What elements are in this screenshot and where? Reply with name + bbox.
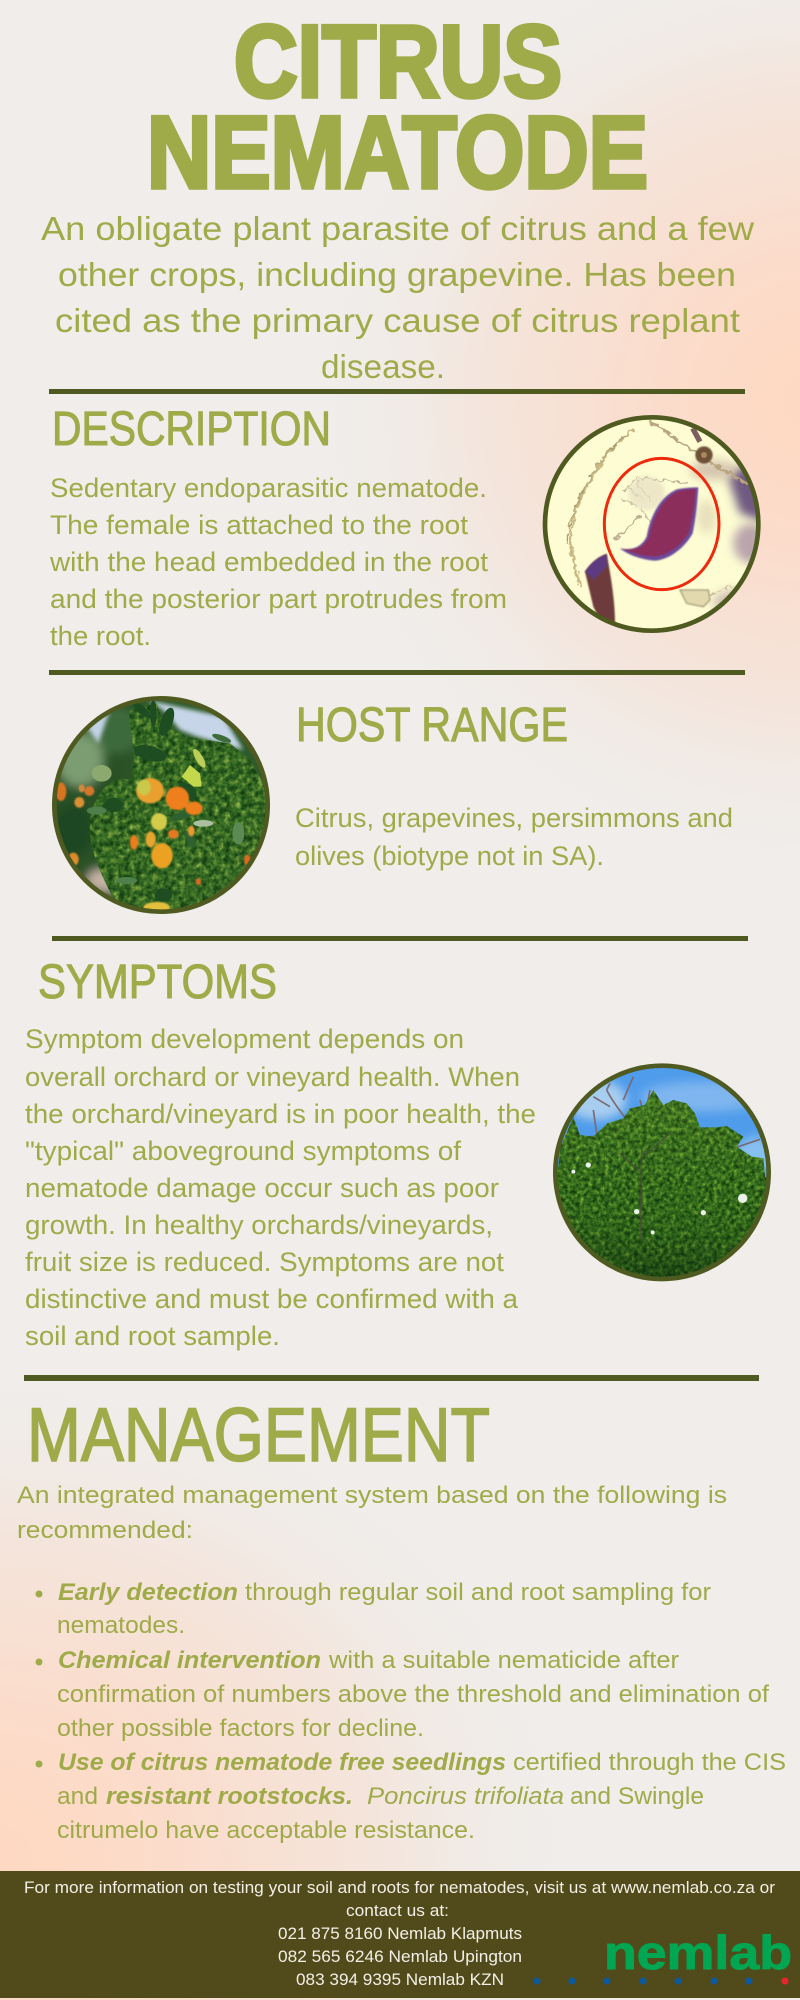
intro text: other crops, including grapevine. Has been: [58, 256, 736, 293]
management intro: An integrated management system based on the following is: [17, 1482, 727, 1509]
heading: management: MANAGEMENT: [27, 1393, 490, 1478]
bullet: chemical intervention: other possible factors for decline.: [57, 1715, 424, 1742]
panel: description: [49, 403, 770, 651]
description text: and the posterior part protrudes from: [50, 584, 507, 614]
host range text: olives (biotype not in SA).: [295, 841, 604, 871]
description text: [49, 473, 507, 651]
photo: citrus tree with oranges: [50, 693, 277, 920]
bullet: nematode free seedlings: citrumelo have acceptable resistance.: [57, 1817, 475, 1844]
contact text: 082 565 6246 Nemlab Upington: [278, 1947, 522, 1966]
bullet: early detection: nematodes.: [57, 1612, 185, 1639]
photo: nematode micrograph: [540, 413, 770, 637]
bullet: chemical intervention: with a suitable nematicide after: [328, 1647, 679, 1674]
photo: declining citrus tree: [550, 1060, 777, 1287]
contact text: 083 394 9395 Nemlab KZN: [296, 1970, 504, 1989]
bullet: chemical intervention: confirmation of numbers above the threshold and elimination of: [57, 1681, 769, 1708]
symptoms text: fruit size is reduced. Symptoms are not: [25, 1247, 505, 1277]
contact text: 021 875 8160 Nemlab Klapmuts: [278, 1924, 522, 1943]
symptoms text: overall orchard or vineyard health. When: [25, 1062, 520, 1092]
symptoms text: growth. In healthy orchards/vineyards,: [25, 1210, 493, 1240]
bullet: nematode free seedlings: and: [57, 1783, 98, 1810]
panel: footer: [0, 1871, 800, 1998]
contact text: [24, 1878, 775, 1989]
heading: description: DESCRIPTION: [52, 403, 331, 456]
symptoms text: [25, 1024, 536, 1351]
symptoms text: nematode damage occur such as poor: [25, 1173, 499, 1203]
logo: nemlab: [534, 1926, 792, 1984]
bullet: early detection: Early detection: [58, 1579, 238, 1606]
bullet: nematode free seedlings: certified through the CIS: [513, 1749, 786, 1776]
heading: symptoms: SYMPTOMS: [38, 956, 277, 1009]
intro text: cited as the primary cause of citrus replant: [55, 302, 740, 339]
symptoms text: soil and root sample.: [25, 1321, 280, 1351]
red highlight ellipse: [604, 458, 719, 590]
symptoms text: distinctive and must be confirmed with a: [25, 1284, 518, 1314]
description text: the root.: [50, 621, 151, 651]
title: CITRUS: [234, 4, 562, 118]
description text: The female is attached to the root: [50, 510, 469, 540]
bullet: nematode free seedlings: [36, 1749, 786, 1844]
contact text: For more information on testing your soil and roots for nematodes, visit us at www.nemlab.co.za or: [24, 1878, 775, 1897]
heading: host range: HOST RANGE: [296, 699, 568, 752]
bullet: nematode free seedlings: Use of citrus nematode free seedlings: [58, 1749, 506, 1776]
panel: symptoms: [25, 956, 777, 1351]
bullet: nematode free seedlings: Poncirus trifoliata: [367, 1783, 564, 1810]
bullet: early detection: [36, 1579, 711, 1639]
bullet: chemical intervention: [36, 1647, 769, 1742]
description text: Sedentary endoparasitic nematode.: [50, 473, 487, 503]
title: [147, 4, 648, 210]
description text: with the head embedded in the root: [49, 547, 489, 577]
logo: nemlab: nemlab: [604, 1926, 792, 1979]
intro text: [41, 210, 754, 385]
panel: management: [17, 1393, 786, 1844]
management intro: recommended:: [17, 1517, 193, 1544]
panel: host range: [50, 693, 733, 920]
bullet: chemical intervention: Chemical intervention: [58, 1647, 321, 1674]
symptoms text: Symptom development depends on: [25, 1024, 464, 1054]
title: NEMATODE: [147, 96, 648, 210]
host range text: Citrus, grapevines, persimmons and: [295, 803, 733, 833]
bullet: nematode free seedlings: and Swingle: [570, 1783, 704, 1810]
symptoms text: the orchard/vineyard is in poor health, the: [25, 1099, 536, 1129]
intro text: disease.: [321, 348, 445, 385]
intro text: An obligate plant parasite of citrus and a few: [41, 210, 754, 247]
bullet: nematode free seedlings: resistant rootstocks.: [106, 1783, 353, 1810]
bullet: early detection: through regular soil and root sampling for: [245, 1579, 711, 1606]
contact text: contact us at:: [346, 1901, 449, 1920]
management intro: [17, 1482, 727, 1544]
host range text: [295, 803, 733, 871]
symptoms text: "typical" aboveground symptoms of: [25, 1136, 462, 1166]
